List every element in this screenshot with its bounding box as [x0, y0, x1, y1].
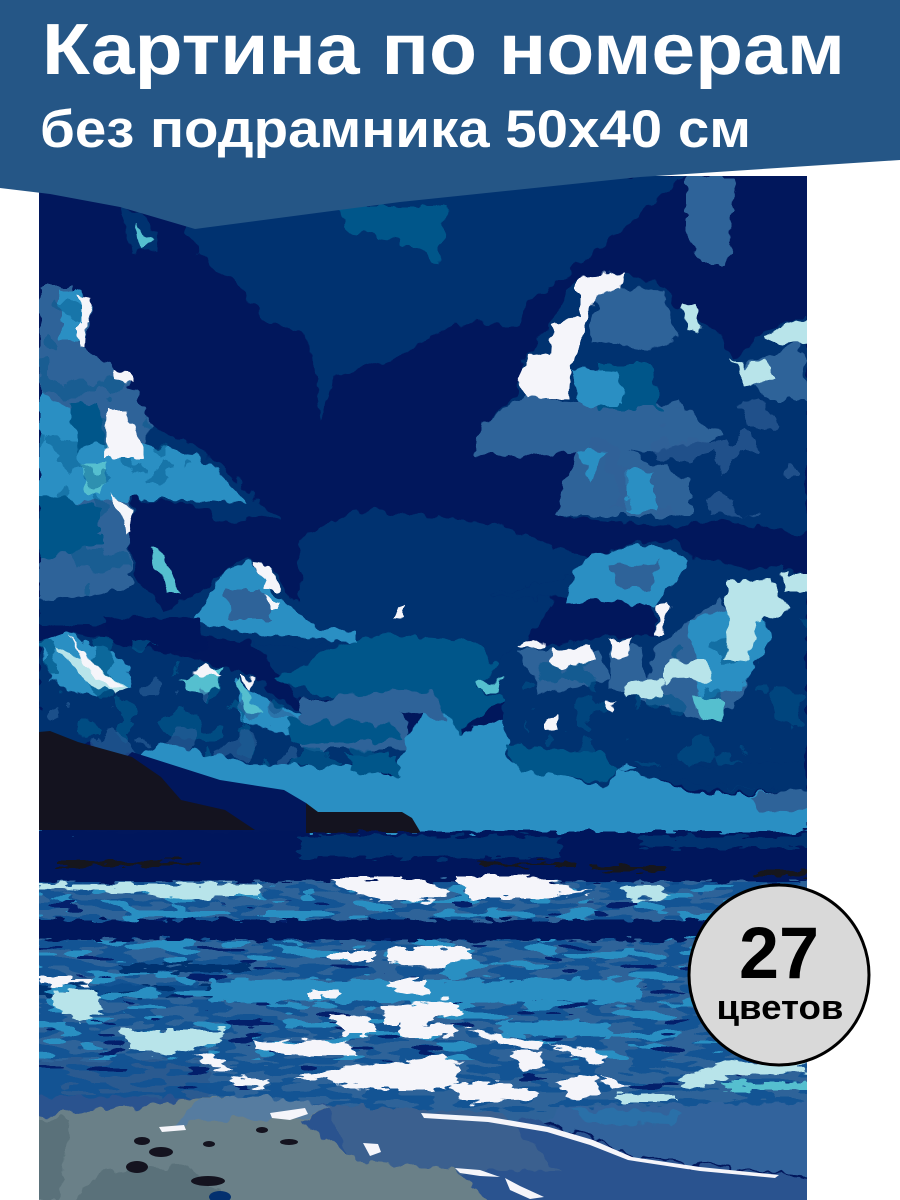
- beach: [20, 1095, 830, 1200]
- middle left cloud: [191, 563, 357, 643]
- dark headland: [39, 731, 421, 836]
- wave bands: [39, 916, 704, 1039]
- wave mottling: [39, 882, 807, 1112]
- horizon cloud bands: [285, 690, 807, 812]
- central cloud band: [250, 510, 588, 700]
- pebbles: [126, 1127, 298, 1200]
- badge: 27 colours: 27: [739, 913, 819, 994]
- subtitle: без подрамника 50х40 см: [40, 100, 751, 159]
- mottling in clouds: [39, 300, 807, 790]
- sand highlights: [159, 1108, 544, 1199]
- wave highlights: [39, 876, 807, 1102]
- badge: 27 colours: [689, 885, 869, 1065]
- sky clouds: [39, 176, 807, 793]
- title: Картина по номерам: [42, 10, 845, 90]
- painting: night sea: [20, 176, 830, 1200]
- lower left cloud: [39, 633, 420, 770]
- cloud highlights: [55, 273, 815, 732]
- lower right cloud: [475, 540, 807, 793]
- whites: [519, 273, 622, 399]
- pale tints: [725, 578, 789, 663]
- horizon glow: [39, 712, 807, 836]
- badge: 27 colours: цветов: [716, 989, 844, 1027]
- foam line: [421, 1113, 779, 1178]
- sea: [20, 832, 830, 1122]
- upper right cloud: [475, 273, 807, 535]
- moon: [235, 187, 301, 245]
- header banner: [0, 0, 900, 229]
- left cloud column: [39, 426, 294, 643]
